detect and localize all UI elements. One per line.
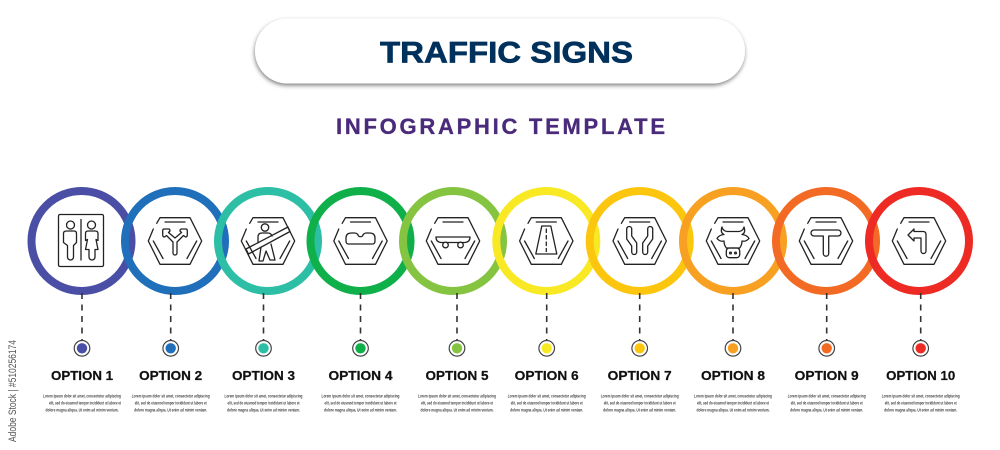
label 7: OPTION 7 — [608, 368, 672, 383]
icon: left turn sign — [892, 218, 946, 264]
dashed connector 4 — [360, 293, 362, 341]
label 10: OPTION 10 — [886, 368, 955, 383]
icon: road sign — [520, 218, 573, 264]
description 10 — [882, 394, 960, 412]
marker 4 — [353, 340, 368, 356]
description 3: elit, sed do eiusmod tempor incididunt ut labore et — [228, 400, 300, 406]
marker 8 — [725, 340, 741, 356]
marker 7 — [632, 340, 648, 356]
label 2: OPTION 2 — [139, 368, 202, 383]
description 3 — [224, 394, 303, 412]
dashed connector 1 — [81, 293, 83, 341]
ring 8 — [683, 191, 783, 291]
marker 1 — [74, 340, 90, 356]
description 4: elit, sed do eiusmod tempor incididunt ut labore et — [324, 400, 397, 406]
description 4: Lorem ipsum dolor sit amet, consectetur adipiscing — [322, 394, 400, 398]
description 3: dolore magna aliqua. Ut enim ad minim veniam. — [227, 408, 300, 412]
description 5: Lorem ipsum dolor sit amet, consectetur adipiscing — [418, 394, 496, 398]
option 6 — [496, 191, 596, 412]
dashed connector 2 — [170, 293, 172, 341]
label 8: OPTION 8 — [701, 368, 765, 383]
description 5: dolore magna aliqua. Ut enim ad minim veniam. — [420, 408, 494, 412]
description 7: Lorem ipsum dolor sit amet, consectetur adipiscing — [601, 394, 679, 398]
description 5 — [418, 394, 496, 412]
label 1: OPTION 1 — [51, 368, 113, 383]
dashed connector 6 — [546, 293, 548, 341]
description 9: elit, sed do eiusmod tempor incididunt ut labore et — [791, 400, 863, 406]
description 2: dolore magna aliqua. Ut enim ad minim veniam. — [134, 408, 207, 412]
label 9: OPTION 9 — [795, 368, 859, 383]
description 10: Lorem ipsum dolor sit amet, consectetur adipiscing — [882, 394, 960, 398]
ring 10 — [869, 191, 969, 291]
description 5: elit, sed do eiusmod tempor incididunt ut labore et — [421, 400, 493, 406]
marker 10 — [913, 340, 928, 356]
description 2 — [132, 394, 210, 412]
description 1: dolore magna aliqua. Ut enim ad minim veniam. — [46, 408, 118, 412]
dashed connector 7 — [639, 293, 641, 341]
description 6: dolore magna aliqua. Ut enim ad minim veniam. — [510, 408, 583, 412]
marker 6 — [539, 340, 554, 356]
description 2: Lorem ipsum dolor sit amet, consectetur adipiscing — [132, 394, 210, 398]
ring 5 — [403, 191, 503, 291]
description 8: elit, sed do eiusmod tempor incididunt ut labore et — [697, 400, 769, 406]
description 6 — [508, 394, 586, 412]
dashed connector 3 — [262, 293, 264, 341]
dashed connector 10 — [920, 293, 922, 341]
ring 9 — [776, 191, 876, 291]
description 7: elit, sed do eiusmod tempor incididunt ut labore et — [604, 400, 676, 406]
description 6: elit, sed do eiusmod tempor incididunt ut labore et — [511, 400, 583, 406]
marker 2 — [163, 340, 178, 356]
ring 4 — [310, 191, 410, 291]
label 4: OPTION 4 — [328, 368, 393, 383]
description 4 — [322, 394, 400, 412]
description 7: dolore magna aliqua. Ut enim ad minim veniam. — [603, 408, 676, 412]
dashed connector 5 — [456, 293, 458, 341]
label 5: OPTION 5 — [426, 368, 488, 383]
description 7 — [601, 394, 679, 412]
description 8: dolore magna aliqua. Ut enim ad minim veniam. — [696, 408, 770, 412]
option 7 — [590, 191, 690, 412]
marker 9 — [819, 340, 834, 356]
description 6: Lorem ipsum dolor sit amet, consectetur adipiscing — [508, 394, 586, 398]
description 10: dolore magna aliqua. Ut enim ad minim veniam. — [884, 408, 957, 412]
icon: bumpy shape sign — [334, 218, 387, 264]
option 4 — [310, 191, 410, 412]
description 9: dolore magna aliqua. Ut enim ad minim veniam. — [790, 408, 863, 412]
description 2: elit, sed do eiusmod tempor incididunt ut labore et — [135, 400, 207, 406]
option 3 — [218, 191, 318, 412]
option 10 — [869, 191, 969, 412]
description 9 — [788, 394, 866, 412]
option 9 — [776, 191, 876, 412]
stock credit: Adobe Stock | #510256174 — [7, 340, 19, 442]
description 9: Lorem ipsum dolor sit amet, consectetur adipiscing — [788, 394, 866, 398]
label 6: OPTION 6 — [515, 368, 579, 383]
option 2 — [125, 191, 225, 412]
icon: skateboard sign — [426, 218, 480, 264]
icon: T junction sign — [799, 218, 853, 264]
marker 5 — [449, 340, 465, 356]
icon: cattle sign — [706, 218, 760, 264]
icon: no pedestrians sign — [241, 218, 295, 264]
ring 2 — [125, 191, 225, 291]
icon: elevator — [58, 214, 104, 266]
description 3: Lorem ipsum dolor sit amet, consectetur adipiscing — [224, 394, 303, 398]
description 1: Lorem ipsum dolor sit amet, consectetur adipiscing — [43, 394, 121, 398]
option 5 — [403, 191, 503, 412]
marker 3 — [256, 340, 271, 356]
option 8 — [683, 191, 783, 412]
description 10: elit, sed do eiusmod tempor incididunt ut labore et — [885, 400, 957, 406]
description 8 — [694, 394, 772, 412]
ring 6 — [496, 191, 596, 291]
description 1: elit, sed do eiusmod tempor incididunt ut labore et — [49, 400, 121, 406]
description 1 — [43, 394, 121, 412]
title pill — [255, 18, 745, 84]
subtitle: INFOGRAPHIC TEMPLATE — [336, 114, 665, 139]
icon: fork road sign — [148, 218, 202, 264]
description 4: dolore magna aliqua. Ut enim ad minim veniam. — [324, 408, 397, 412]
option 1 — [32, 191, 132, 412]
dashed connector 8 — [732, 293, 734, 341]
ring 3 — [218, 191, 318, 291]
ring 1 — [32, 191, 132, 291]
dashed connector 9 — [826, 293, 828, 341]
ring 7 — [590, 191, 690, 291]
title text: TRAFFIC SIGNS — [380, 36, 633, 70]
label 3: OPTION 3 — [232, 368, 295, 383]
description 8: Lorem ipsum dolor sit amet, consectetur adipiscing — [694, 394, 772, 398]
icon: road narrows sign — [613, 218, 666, 264]
